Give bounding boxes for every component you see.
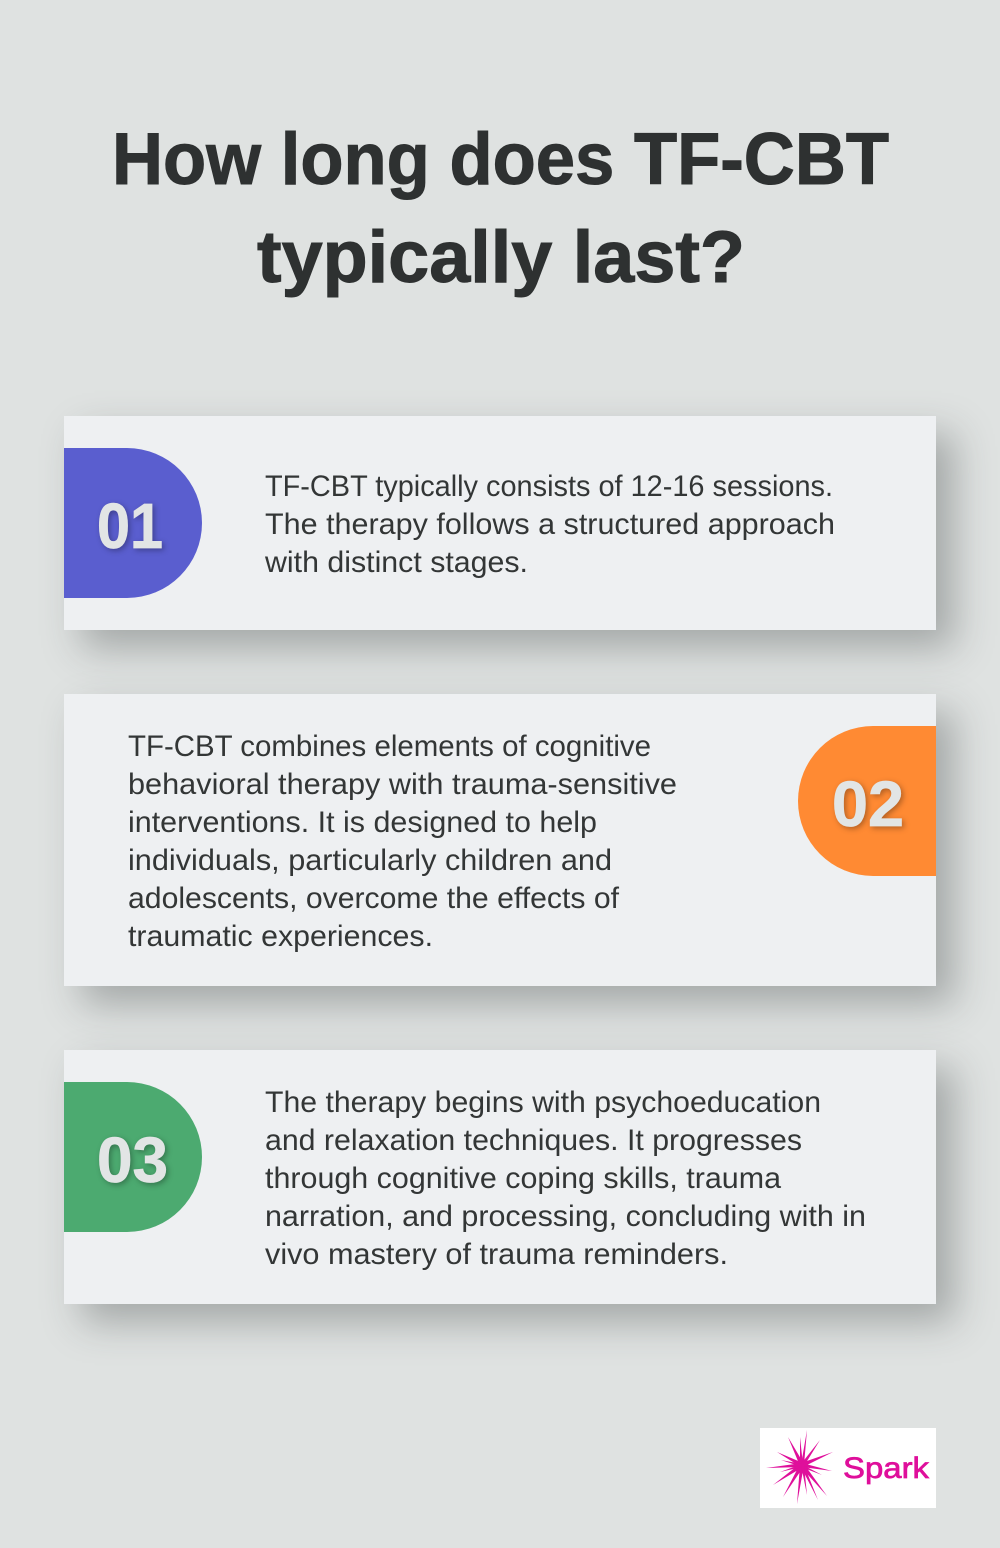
text block: step 03: narration, and processing, concluding with in [265,1200,866,1233]
badge: 02: 02 [832,768,904,840]
text block: step 02: interventions. It is designed to help [128,806,597,839]
text block: step 03: vivo mastery of trauma reminders. [265,1238,728,1271]
badge: 01 [64,448,202,598]
text block: step 02: TF-CBT combines elements of cognitive [128,730,651,763]
panel: step 03 [64,1050,936,1304]
title [112,119,889,298]
badge: 03 [64,1082,202,1232]
badge: 02 [798,726,936,876]
text block: step 02: behavioral therapy with trauma-sensitive [128,768,677,801]
text block: step 01: TF-CBT typically consists of 12-16 sessions. [265,470,833,503]
text block: step 01 [264,470,835,579]
badge: 03: 03 [97,1124,168,1196]
text block: step 02: adolescents, overcome the effects of [128,882,620,915]
icon: starburst [766,1430,833,1504]
text block: step 02: individuals, particularly children and [128,844,612,877]
text block: step 03: The therapy begins with psychoeducation [265,1086,821,1119]
text block: step 03: through cognitive coping skills, trauma [265,1162,781,1195]
text block: step 01: with distinct stages. [264,546,528,579]
title: How long does TF-CBT [112,119,889,200]
text block: step 02: traumatic experiences. [128,920,433,953]
panel: step 02 [64,694,936,986]
title: typically last? [257,217,745,298]
logo wordmark: Spark [843,1452,930,1485]
text block: step 03 [265,1086,866,1271]
text block: step 02 [128,730,677,953]
badge: 01: 01 [97,490,163,562]
text block: step 03: and relaxation techniques. It progresses [265,1124,802,1157]
panel: step 01 [64,416,936,630]
text block: step 01: The therapy follows a structured approach [265,508,835,541]
